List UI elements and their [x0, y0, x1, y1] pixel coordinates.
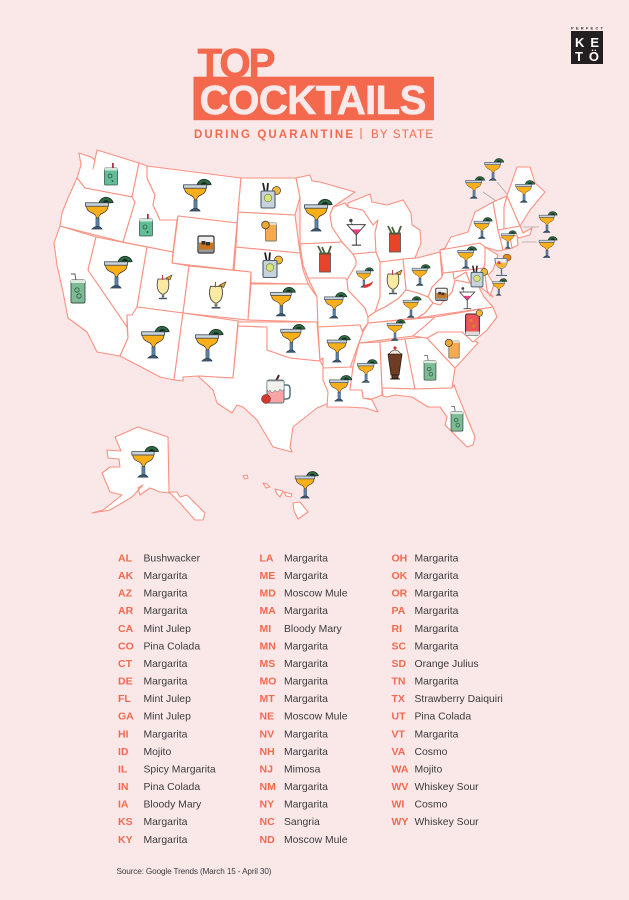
legend column 3: RI: [392, 623, 402, 635]
icon: CO pina colada: [210, 282, 226, 308]
legend column 1: GA: [118, 711, 134, 723]
icon: SC orange julius: [445, 339, 459, 358]
legend column 1: AR: [118, 605, 134, 617]
legend column 1: Mint Julep: [144, 694, 191, 705]
legend column 1: [118, 552, 216, 846]
icon: IA bloody mary: [318, 246, 331, 272]
icon: ND moscow mule: [261, 183, 280, 208]
icon: WV whiskey sour: [436, 288, 447, 300]
state: Massachusetts: [498, 226, 532, 238]
subtitle divider: [360, 128, 362, 139]
state: Michigan: [348, 194, 421, 262]
source note: Source: Google Trends (March 15 - April 30): [116, 867, 272, 876]
legend column 3: Whiskey Sour: [414, 817, 479, 828]
state: Arkansas: [318, 325, 363, 368]
icon: NY margarita: [474, 218, 492, 238]
legend column 3: WI: [392, 799, 404, 811]
state: Connecticut: [500, 237, 512, 250]
subtitle: DURING QUARANTINE: [194, 129, 353, 141]
icon: MA margarita: [539, 212, 557, 232]
legend column 3: Pina Colada: [414, 712, 471, 723]
leader line: Rhode Island: [522, 241, 537, 243]
legend column 3: Margarita: [414, 624, 459, 635]
state: Kansas: [248, 284, 318, 322]
legend column 3: Margarita: [414, 641, 459, 652]
legend column 1: Margarita: [144, 677, 188, 688]
legend column 2: NM: [260, 781, 276, 793]
state: Vermont: [493, 196, 507, 230]
legend column 3: [392, 552, 503, 828]
legend column 1: IL: [118, 764, 128, 776]
state: New Mexico: [174, 313, 238, 381]
legend column 2: Margarita: [284, 694, 328, 705]
legend column 3: PA: [392, 605, 406, 617]
legend column 2: MI: [260, 623, 271, 635]
icon: DE margarita: [492, 279, 507, 295]
legend column 3: TX: [392, 693, 405, 705]
title word: TOP: TOP: [198, 40, 276, 86]
legend column 3: Margarita: [414, 606, 459, 617]
icon: MS margarita: [357, 360, 377, 382]
legend column 3: WV: [392, 781, 408, 793]
legend column 3: UT: [392, 711, 406, 723]
legend column 1: IN: [118, 781, 128, 793]
legend column 3: Margarita: [414, 677, 459, 688]
legend column 1: CT: [118, 658, 133, 670]
state: New Jersey: [484, 247, 498, 275]
logo: Perfect Keto: KE: [575, 35, 599, 50]
legend column 1: Spicy Margarita: [144, 764, 216, 776]
legend column 2: Margarita: [284, 800, 328, 811]
legend column 2: NV: [260, 728, 274, 740]
legend column 1: Bloody Mary: [144, 800, 202, 811]
icon: MT margarita: [184, 179, 211, 211]
logo: Perfect Keto: TÖ: [575, 49, 599, 64]
state: Maryland: [453, 268, 493, 297]
legend column 2: LA: [260, 552, 274, 564]
icon: AK margarita: [132, 446, 158, 477]
state: South Carolina: [427, 332, 478, 368]
legend column 2: Margarita: [284, 659, 328, 670]
icon: AR margarita: [327, 336, 350, 362]
icon: TX strawberry daiquiri: [262, 375, 290, 404]
icon: VT margarita: [466, 177, 485, 198]
legend column 3: Orange Julius: [414, 659, 479, 670]
legend column 2: NC: [260, 816, 275, 828]
logo: Perfect Keto: [571, 26, 604, 64]
legend column 3: Margarita: [414, 729, 459, 740]
icon: NV margarita: [104, 256, 132, 288]
state: North Dakota: [238, 178, 300, 215]
legend column 3: VA: [392, 746, 406, 758]
icon: HI margarita: [295, 472, 318, 498]
legend column 1: Pina Colada: [144, 641, 200, 652]
legend column 1: AL: [118, 552, 133, 564]
legend column 2: Bloody Mary: [284, 624, 343, 635]
subtitle: by state: BY STATE: [371, 129, 433, 141]
legend column 2: MN: [260, 640, 276, 652]
state: Oregon: [60, 178, 135, 242]
legend column 1: ID: [118, 746, 129, 758]
icon: GA mint julep: [424, 355, 436, 380]
legend column 2: Margarita: [284, 606, 328, 617]
legend column 1: HI: [118, 728, 129, 740]
state: New York: [440, 202, 503, 251]
state: Nevada: [88, 237, 147, 327]
leader line: Vermont: [483, 192, 496, 201]
icon: WI cosmo: [347, 219, 365, 245]
legend column 1: Pina Colada: [144, 782, 200, 793]
icon: ID mojito: [140, 214, 152, 236]
legend column 2: ND: [260, 834, 275, 846]
title: [194, 40, 434, 141]
legend column 1: Margarita: [144, 817, 188, 828]
map of US states: [54, 150, 545, 520]
state: Tennessee: [359, 317, 435, 343]
legend column 1: Margarita: [144, 589, 188, 600]
icon: CA mint julep: [71, 274, 85, 303]
state: Kentucky: [368, 290, 433, 323]
legend column 2: NH: [260, 746, 275, 758]
icon: SD orange julius: [262, 221, 276, 241]
legend column 2: [260, 552, 348, 846]
legend column 1: Margarita: [144, 606, 188, 617]
icon: MO margarita: [324, 293, 347, 318]
legend column 3: Margarita: [414, 589, 459, 600]
legend column 3: Strawberry Daiquiri: [414, 694, 503, 705]
icon: LA margarita: [329, 376, 352, 401]
state: Utah: [137, 247, 189, 313]
leader line: Massachusetts: [523, 226, 539, 228]
icon: AL bushwacker: [388, 346, 402, 379]
state: Mississippi: [350, 342, 382, 399]
icon: FL mint julep: [451, 406, 463, 431]
state: Colorado: [183, 266, 251, 320]
legend column 1: Mint Julep: [144, 712, 191, 723]
state: Nebraska: [234, 247, 308, 284]
icon: CT margarita: [501, 231, 517, 248]
state: Florida: [382, 385, 475, 447]
legend column 1: IA: [118, 799, 129, 811]
state: Maine: [507, 167, 545, 226]
state: Iowa: [300, 242, 356, 280]
legend column 1: Margarita: [144, 571, 188, 582]
state: California: [54, 226, 128, 356]
state: Georgia: [405, 337, 455, 389]
legend column 1: KY: [118, 834, 133, 846]
legend column 3: SC: [392, 640, 407, 652]
state: Ohio: [403, 252, 442, 297]
cocktail icons on map: [71, 159, 557, 498]
state: Hawaii: [243, 475, 308, 519]
state: Wyoming: [172, 216, 237, 270]
legend column 1: Mint Julep: [144, 624, 191, 635]
legend column 2: Margarita: [284, 641, 328, 652]
legend column 2: MD: [260, 588, 276, 600]
icon: IN pina colada: [387, 270, 402, 294]
icon: NJ mimosa: [495, 254, 511, 275]
legend column 3: Margarita: [414, 554, 459, 564]
state: Missouri: [308, 278, 368, 331]
legend column 2: Moscow Mule: [284, 712, 348, 723]
icon: UT pina colada: [157, 275, 172, 298]
title banner: [194, 77, 434, 120]
legend column 2: Mimosa: [284, 764, 321, 776]
legend column 3: OH: [392, 552, 407, 564]
legend column 2: Margarita: [284, 554, 328, 564]
icon: MD moscow mule: [471, 266, 488, 287]
legend column 1: FL: [118, 693, 131, 705]
icon: OK margarita: [281, 324, 305, 352]
icon: OH margarita: [412, 265, 430, 285]
legend column 2: MT: [260, 693, 275, 705]
state: Washington: [77, 150, 139, 197]
state: Alaska: [92, 427, 205, 520]
legend column 2: Moscow Mule: [284, 835, 348, 846]
legend column 1: Margarita: [144, 659, 188, 670]
legend column 1: DE: [118, 676, 133, 688]
state: North Carolina: [413, 307, 497, 342]
legend column 2: ME: [260, 570, 275, 582]
state: Rhode Island: [510, 235, 518, 248]
state: New Hampshire: [504, 196, 520, 229]
state: Montana: [147, 166, 241, 223]
legend column 3: WA: [392, 764, 409, 776]
state: Illinois: [347, 252, 380, 317]
icon: AZ margarita: [142, 326, 169, 358]
legend column 1: Mojito: [144, 747, 171, 758]
icon: MN margarita: [304, 199, 332, 231]
legend column 2: Margarita: [284, 782, 328, 793]
legend column 3: Cosmo: [414, 800, 448, 811]
state: South Dakota: [236, 212, 300, 253]
legend column 2: Sangria: [284, 817, 320, 828]
legend column 2: NY: [260, 799, 274, 811]
legend column 2: Margarita: [284, 571, 328, 582]
icon: NC sangria: [466, 310, 483, 335]
legend column 3: OK: [392, 570, 408, 582]
legend column 3: OR: [392, 588, 408, 600]
legend column 3: Whiskey Sour: [414, 782, 479, 793]
icon: IL spicy margarita: [356, 268, 374, 288]
icon: KS margarita: [271, 287, 295, 316]
legend column 2: NE: [260, 711, 274, 723]
legend column 2: Margarita: [284, 677, 328, 688]
icon: OR margarita: [86, 197, 113, 229]
legend column 3: Cosmo: [414, 747, 448, 758]
legend column 2: MA: [260, 605, 276, 617]
icon: MI bloody mary: [388, 226, 401, 252]
icon: PA margarita: [458, 247, 477, 268]
legend column 2: MO: [260, 676, 276, 688]
icon: WA mojito: [104, 163, 118, 185]
state: Alabama: [380, 339, 415, 389]
legend column 3: WY: [392, 816, 408, 828]
legend column 1: CO: [118, 640, 134, 652]
icon: NE moscow mule: [263, 252, 282, 278]
icon: KY margarita: [403, 297, 421, 317]
icon: VA cosmo: [460, 287, 475, 309]
icon: NM margarita: [196, 329, 223, 361]
legend column 1: KS: [118, 816, 133, 828]
state: Oklahoma: [238, 322, 320, 361]
state: West Virginia: [428, 272, 470, 305]
legend column 2: Moscow Mule: [284, 589, 348, 600]
icon: RI margarita: [539, 237, 557, 257]
legend column 1: Bushwacker: [144, 554, 201, 564]
logo: Perfect Keto: PERFECT: [571, 26, 604, 30]
legend column 2: MS: [260, 658, 275, 670]
legend column 1: CA: [118, 623, 134, 635]
icon: WY whiskey sour: [198, 236, 214, 253]
legend column 2: NJ: [260, 764, 273, 776]
legend column 1: AK: [118, 570, 134, 582]
icon: NH margarita: [485, 159, 504, 180]
state: Virginia: [417, 280, 493, 318]
icon: TN margarita: [387, 320, 405, 340]
legend column 3: TN: [392, 676, 406, 688]
legend column 2: Margarita: [284, 729, 328, 740]
legend column 1: AZ: [118, 588, 133, 600]
legend column 1: Margarita: [144, 835, 188, 846]
state: Minnesota: [296, 175, 355, 244]
state: Idaho: [123, 163, 177, 252]
state: Wisconsin: [330, 203, 378, 254]
icon: ME margarita: [516, 181, 535, 202]
title word: COCKTAILS: COCKTAILS: [200, 77, 426, 123]
legend column 3: SD: [392, 658, 407, 670]
state: Arizona: [120, 307, 183, 380]
legend column 2: Margarita: [284, 747, 328, 758]
legend column 3: VT: [392, 728, 406, 740]
state: Texas: [198, 326, 329, 452]
leader line: New Hampshire: [497, 182, 507, 194]
legend column 1: Margarita: [144, 729, 188, 740]
legend column 3: Margarita: [414, 571, 459, 582]
state: Indiana: [375, 259, 406, 312]
state: Pennsylvania: [440, 243, 486, 273]
state: Louisiana: [323, 367, 378, 412]
legend column 3: Mojito: [414, 764, 442, 776]
state: Delaware: [484, 268, 494, 296]
